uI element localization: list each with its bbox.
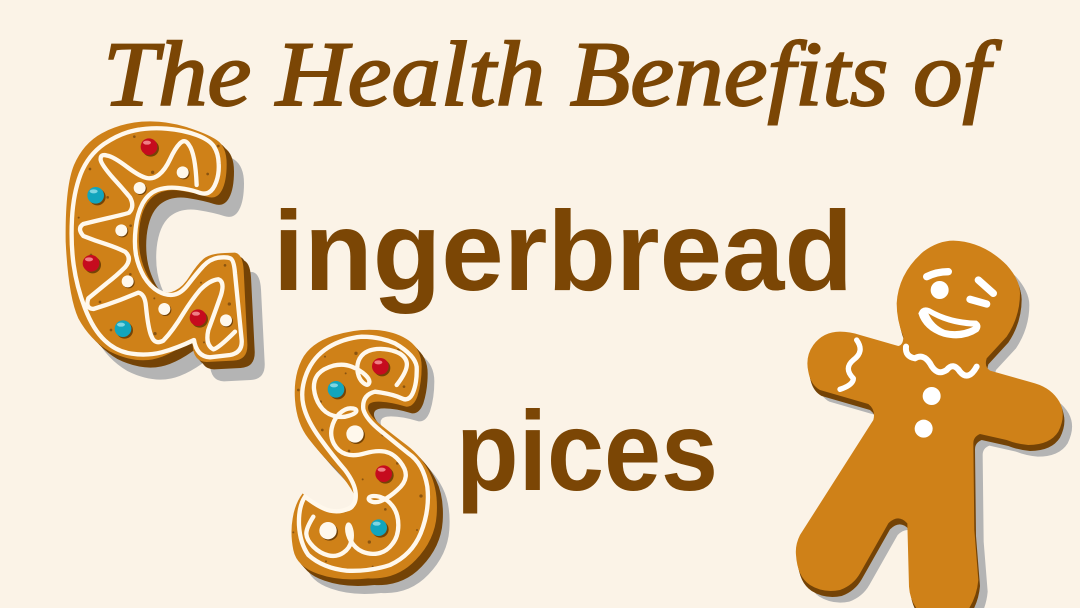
icing on G — [72, 128, 242, 357]
sprinkles on S — [319, 358, 394, 541]
heading word: ingerbread: ingerbread — [273, 188, 853, 314]
heading word: pices: pices — [456, 388, 718, 514]
icon: gingerbread cookie letter G — [66, 121, 265, 381]
buttons — [915, 387, 941, 438]
title: The Health Benefits of — [103, 23, 1002, 125]
specks on G — [78, 135, 231, 343]
specks on S — [292, 349, 423, 568]
sprinkles on G — [83, 138, 233, 339]
arm icing — [840, 340, 860, 389]
collar icing — [906, 347, 977, 376]
icon: winking gingerbread man — [796, 241, 1072, 608]
face — [918, 272, 993, 338]
icing on S — [299, 337, 428, 571]
icon: gingerbread cookie letter S — [291, 330, 450, 594]
